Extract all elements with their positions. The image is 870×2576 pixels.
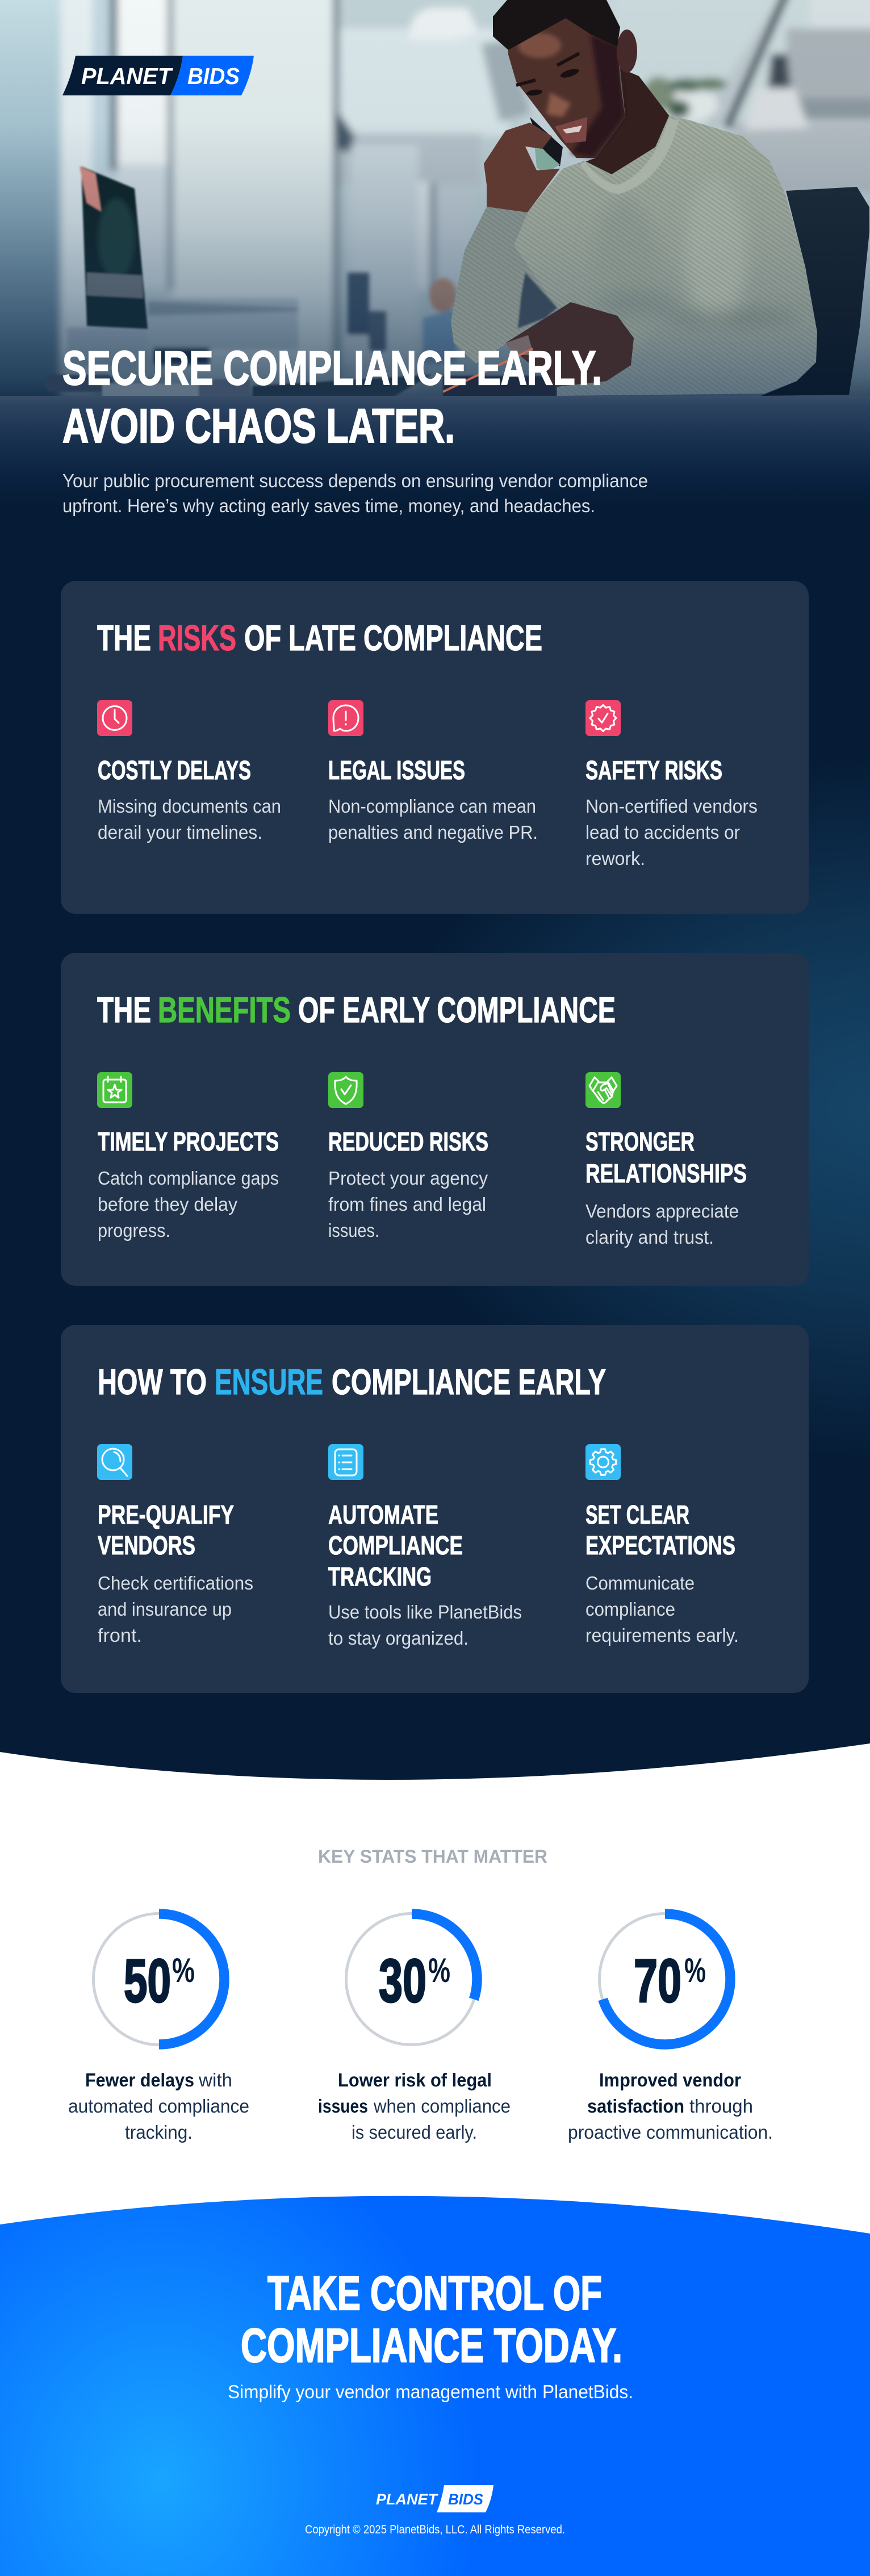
- panel heading: [98, 1362, 606, 1402]
- icon: checklist: [328, 1444, 363, 1480]
- face: [508, 14, 625, 158]
- blue curved background: [0, 2196, 870, 2576]
- stat: 70 percent: 70: [634, 1946, 681, 2015]
- stat description: is secured early.: [352, 2122, 477, 2143]
- stat: 70 percent: %: [684, 1951, 706, 1989]
- intro text: Your public procurement success depends on ensuring vendor compliance: [62, 470, 648, 491]
- item: costly delays: derail your timelines.: [98, 822, 262, 843]
- item: reduced risks: REDUCED RISKS: [328, 1127, 488, 1156]
- face shading: [518, 33, 625, 158]
- stat: 50 percent: [68, 1914, 249, 2143]
- item: legal issues: [328, 700, 538, 843]
- title: SECURE COMPLIANCE EARLY.: [62, 341, 602, 395]
- hero photo: man on phone at office desk: [0, 0, 870, 515]
- item: pre-qualify vendors: Check certifications: [98, 1573, 253, 1594]
- panel: benefits of early compliance: [61, 953, 809, 1286]
- copyright: Copyright © 2025 PlanetBids, LLC. All Rights Reserved.: [305, 2523, 565, 2536]
- panel: how to ensure compliance early: [61, 1325, 809, 1693]
- item: safety risks: SAFETY RISKS: [585, 755, 722, 785]
- panel background: [61, 581, 809, 914]
- stat description: with: [198, 2069, 232, 2090]
- item: pre-qualify vendors: [97, 1444, 253, 1646]
- ring chart 30: [346, 1914, 477, 2044]
- item: pre-qualify vendors: PRE-QUALIFY: [98, 1500, 234, 1529]
- lower hand: [505, 302, 634, 387]
- ear: [617, 30, 637, 73]
- item: reduced risks: from fines and legal: [328, 1194, 486, 1215]
- icon: magnifier: [97, 1444, 132, 1480]
- title: AVOID CHAOS LATER.: [62, 399, 455, 453]
- item: safety risks: lead to accidents or: [585, 822, 740, 843]
- item: safety risks: Non-certified vendors: [585, 796, 758, 817]
- item: pre-qualify vendors: front.: [98, 1625, 142, 1646]
- logo word bids: BIDS: [187, 63, 240, 89]
- panel heading: BENEFITS: [158, 990, 291, 1030]
- desk foreground items: [46, 374, 557, 396]
- stat: 30 percent: [318, 1914, 511, 2143]
- ring chart 70: [600, 1914, 730, 2044]
- panel heading: [97, 618, 542, 658]
- item: pre-qualify vendors: and insurance up: [98, 1599, 232, 1620]
- collar: [580, 118, 679, 194]
- icon: handshake: [585, 1072, 621, 1108]
- item: legal issues: penalties and negative PR.: [328, 822, 538, 843]
- logo: [62, 56, 254, 95]
- item: pre-qualify vendors: VENDORS: [98, 1530, 195, 1560]
- item: automate compliance tracking: AUTOMATE: [328, 1500, 438, 1529]
- item: timely projects: Catch compliance gaps: [98, 1168, 279, 1189]
- panel heading: THE: [97, 990, 151, 1030]
- sweater knit texture: [451, 116, 817, 396]
- item: legal issues: Non-compliance can mean: [328, 796, 536, 817]
- stat description: when compliance: [373, 2096, 511, 2117]
- footer logo: PLANET: [376, 2491, 439, 2508]
- panel heading: COMPLIANCE EARLY: [332, 1362, 606, 1402]
- item: set clear expectations: compliance: [585, 1599, 675, 1620]
- navy page background: [0, 0, 870, 1874]
- office chair: [761, 187, 869, 396]
- stat description: [318, 2069, 511, 2143]
- panel heading: OF EARLY COMPLIANCE: [298, 990, 616, 1030]
- gap behind hand: [535, 148, 560, 170]
- item: set clear expectations: SET CLEAR: [585, 1500, 689, 1529]
- panel background: [61, 953, 809, 1286]
- item: automate compliance tracking: TRACKING: [328, 1562, 432, 1591]
- desk fade to navy: [0, 396, 870, 483]
- item: timely projects: before they delay: [98, 1194, 237, 1215]
- facial features: [516, 53, 587, 143]
- item: reduced risks: [328, 1072, 488, 1241]
- item: automate compliance tracking: COMPLIANCE: [328, 1530, 463, 1560]
- item: safety risks: rework.: [585, 848, 645, 869]
- stat description: satisfaction: [587, 2096, 684, 2117]
- sweater body: [514, 116, 817, 396]
- stat description: [568, 2069, 773, 2143]
- office background: [0, 0, 870, 403]
- cta subtext: Simplify your vendor management with PlanetBids.: [228, 2381, 633, 2402]
- stats heading: KEY STATS THAT MATTER: [318, 1846, 547, 1867]
- arm gap shadow: [518, 273, 557, 328]
- intro text: upfront. Here’s why acting early saves time, money, and headaches.: [62, 495, 595, 516]
- stat description: issues: [318, 2096, 368, 2117]
- item: stronger relationships: [585, 1072, 747, 1248]
- desktop monitor: [80, 166, 148, 329]
- panel: risks of late compliance: [61, 581, 809, 914]
- neck: [585, 68, 670, 176]
- item: set clear expectations: EXPECTATIONS: [585, 1530, 735, 1560]
- item: timely projects: progress.: [98, 1220, 170, 1241]
- stat description: [68, 2069, 249, 2143]
- stat: 30 percent: 30: [379, 1946, 426, 2015]
- icon: verified badge: [585, 700, 621, 736]
- icon: shield check: [328, 1072, 363, 1108]
- stat description: Lower risk of legal: [338, 2069, 492, 2090]
- item: legal issues: LEGAL ISSUES: [328, 755, 465, 785]
- footer logo: [376, 2485, 493, 2512]
- panel heading: THE: [97, 618, 151, 658]
- icon: calendar star: [97, 1072, 132, 1108]
- hair: [493, 0, 620, 50]
- white stats section with curved top: [0, 1743, 870, 2272]
- stat description: through: [689, 2096, 753, 2117]
- item: safety risks: [585, 700, 758, 869]
- logo blue part: [170, 56, 254, 95]
- panel heading: OF LATE COMPLIANCE: [244, 618, 542, 658]
- stat description: Improved vendor: [599, 2069, 741, 2090]
- cta heading: TAKE CONTROL OF: [267, 2266, 602, 2320]
- cta heading: [241, 2266, 622, 2372]
- item: set clear expectations: requirements early.: [585, 1625, 739, 1646]
- item: set clear expectations: Communicate: [585, 1573, 695, 1594]
- stat description: Fewer delays: [85, 2069, 194, 2090]
- phone: [530, 117, 563, 166]
- stat description: tracking.: [125, 2122, 193, 2143]
- item: costly delays: COSTLY DELAYS: [98, 755, 251, 785]
- left sleeve: [451, 207, 557, 363]
- item: automate compliance tracking: Use tools like PlanetBids: [328, 1601, 522, 1622]
- call to action panel: [0, 2196, 870, 2576]
- sweater shading: [604, 187, 788, 327]
- item: automate compliance tracking: [328, 1444, 522, 1649]
- stat: 30 percent: %: [428, 1951, 450, 1989]
- background glow: [284, 681, 870, 1533]
- icon: gear: [585, 1444, 621, 1480]
- panel heading: [97, 990, 616, 1030]
- icon: alert speech bubble: [328, 700, 363, 736]
- item: timely projects: TIMELY PROJECTS: [98, 1127, 279, 1156]
- desk clutter blurred: [66, 273, 457, 367]
- panel background: [61, 1325, 809, 1693]
- intro text: [62, 470, 648, 516]
- item: timely projects: [97, 1072, 279, 1241]
- item: costly delays: Missing documents can: [98, 796, 281, 817]
- panel heading: ENSURE: [215, 1362, 323, 1402]
- panel heading: HOW TO: [98, 1362, 207, 1402]
- item: reduced risks: issues.: [328, 1220, 379, 1241]
- stat description: proactive communication.: [568, 2122, 773, 2143]
- panel heading: RISKS: [158, 618, 236, 658]
- cta heading: COMPLIANCE TODAY.: [241, 2319, 622, 2372]
- item: stronger relationships: clarity and trust.: [585, 1227, 714, 1248]
- item: automate compliance tracking: to stay organized.: [328, 1628, 469, 1649]
- title: [62, 341, 602, 453]
- photo fade overlay: [0, 127, 870, 396]
- stat: 50 percent: %: [172, 1951, 195, 1989]
- stat: 70 percent: [568, 1914, 773, 2143]
- paper and pen: [443, 335, 534, 392]
- item: set clear expectations: [585, 1444, 739, 1646]
- ring chart 50: [93, 1914, 225, 2044]
- stat description: automated compliance: [68, 2096, 249, 2117]
- man: [443, 0, 869, 396]
- footer logo: BIDS: [448, 2491, 483, 2508]
- stat: 50 percent: 50: [124, 1946, 171, 2015]
- item: costly delays: [97, 700, 281, 843]
- item: stronger relationships: STRONGER: [585, 1127, 695, 1156]
- item: stronger relationships: Vendors appreciate: [585, 1201, 739, 1222]
- logo word planet: PLANET: [81, 63, 173, 89]
- item: stronger relationships: RELATIONSHIPS: [585, 1159, 747, 1188]
- logo dark part: [62, 56, 183, 95]
- icon: clock: [97, 700, 132, 736]
- hand at ear: [484, 123, 560, 212]
- item: reduced risks: Protect your agency: [328, 1168, 488, 1189]
